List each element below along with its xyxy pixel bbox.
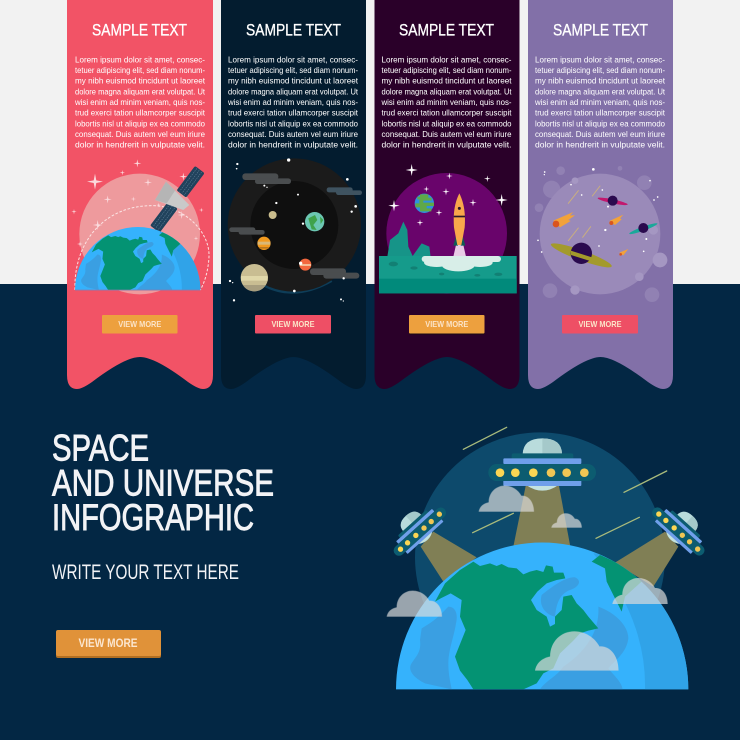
panel 1 body text: consequat. Duis autem vel eum iriure <box>75 129 205 139</box>
white stars <box>229 158 357 302</box>
panel: satellite and earth <box>67 0 213 389</box>
panel 1 body text: dolore magna aliquam erat volutpat. Ut <box>75 86 206 96</box>
panel: solar system <box>221 0 366 389</box>
ground <box>379 256 517 293</box>
main button: VIEW MORE <box>78 638 138 650</box>
icon: earth <box>396 543 690 689</box>
illustration: planets and comets <box>535 166 667 302</box>
panel 1 body text <box>74 54 206 150</box>
light beams <box>421 486 678 587</box>
panel 4 body text: consequat. Duis autem vel eum iriure <box>535 129 665 139</box>
panel 3 body text: wisi enim ad minim veniam, quis nos- <box>381 97 512 107</box>
panel 2 heading: SAMPLE TEXT <box>246 20 341 40</box>
panel 4 body text: trud exerci tation ullamcorper suscipit <box>535 108 666 118</box>
panel 3 button <box>409 315 484 334</box>
background: dark navy lower area <box>0 284 740 740</box>
panel 2 body text: my nibh euismod tincidunt ut laoreet <box>228 76 359 86</box>
panel 4 body text: dolore magna aliquam erat volutpat. Ut <box>535 86 666 96</box>
clouds <box>387 486 668 671</box>
background: light top band <box>0 0 740 284</box>
panel 4 body text: dolor in hendrerit in vulputate velit. <box>535 140 665 150</box>
panel 3 body text: dolor in hendrerit in vulputate velit. <box>382 140 512 150</box>
ringed planet: pink <box>597 196 628 206</box>
panel 3 body text: Lorem ipsum dolor sit amet, consec- <box>382 54 512 64</box>
title: INFOGRAPHIC <box>52 497 254 538</box>
title: AND UNIVERSE <box>52 462 274 504</box>
panel: ringed planets and comets <box>528 0 673 389</box>
illustration: satellite orbiting earth <box>71 159 209 294</box>
panel 2 body text: dolore magna aliquam erat volutpat. Ut <box>228 86 359 96</box>
rock formation <box>387 222 431 257</box>
panel 1 body text: dolor in hendrerit in vulputate velit. <box>75 140 205 150</box>
panel 3 body text: my nibh euismod tincidunt ut laoreet <box>382 76 512 86</box>
planet: small beige <box>269 211 277 219</box>
panel 4 heading: SAMPLE TEXT <box>553 20 648 40</box>
main button <box>56 630 161 658</box>
icon: satellite <box>150 166 205 233</box>
ringed planet: large <box>549 240 613 271</box>
planet: earth <box>305 212 324 231</box>
panel 2 button: VIEW MORE <box>272 319 315 329</box>
icon: rocket <box>453 193 466 257</box>
panel 1 button: VIEW MORE <box>118 319 162 329</box>
panel 2 body text <box>227 54 359 150</box>
panel 2 body text: tetuer adipiscing elit, sed diam nonum- <box>228 65 358 75</box>
panel 2 body text: trud exerci tation ullamcorper suscipit <box>228 108 359 118</box>
planet: red <box>299 259 311 271</box>
planet: blue and green <box>415 194 434 213</box>
panel 4 button: VIEW MORE <box>578 319 622 329</box>
panel 4 body text: wisi enim ad minim veniam, quis nos- <box>534 97 665 107</box>
panel 3 heading: SAMPLE TEXT <box>399 20 494 40</box>
planet: large beige striped <box>241 264 268 291</box>
panel 1 body text: trud exerci tation ullamcorper suscipit <box>75 108 206 118</box>
panel 2 body text: dolor in hendrerit in vulputate velit. <box>228 140 358 150</box>
panel 1 body text: wisi enim ad minim veniam, quis nos- <box>74 97 205 107</box>
panel 3 body text <box>381 54 512 150</box>
panel 3 body text: tetuer adipiscing elit, sed diam nonum- <box>382 65 512 75</box>
title <box>52 428 274 538</box>
panel 4 button <box>562 315 638 334</box>
panel 2 body text: Lorem ipsum dolor sit amet, consec- <box>228 54 358 64</box>
illustration: UFOs over earth <box>381 427 717 689</box>
illustration: planets in dark orbit <box>228 158 362 302</box>
planet: orange striped <box>257 237 271 250</box>
UFO: left <box>381 494 452 562</box>
panel 1 button <box>102 315 178 334</box>
panel 4 body text <box>534 54 666 150</box>
panel 1 body text: Lorem ipsum dolor sit amet, consec- <box>75 54 205 64</box>
panel 4 body text: Lorem ipsum dolor sit amet, consec- <box>535 54 665 64</box>
panel 2 button <box>255 315 331 334</box>
backdrop circle <box>415 432 665 682</box>
panel 4 body text: tetuer adipiscing elit, sed diam nonum- <box>535 65 665 75</box>
icon: earth dome <box>75 227 201 290</box>
panel 1 body text: tetuer adipiscing elit, sed diam nonum- <box>75 65 205 75</box>
panel 3 body text: consequat. Duis autem vel eum iriure <box>382 129 512 139</box>
panel 3 button: VIEW MORE <box>425 319 469 329</box>
panel 3 body text: trud exerci tation ullamcorper suscipit <box>382 108 512 118</box>
panel 1 heading: SAMPLE TEXT <box>92 20 187 40</box>
smoke cloud <box>422 256 501 271</box>
panel 2 body text: consequat. Duis autem vel eum iriure <box>228 129 358 139</box>
grey clouds <box>229 173 359 279</box>
illustration: rocket lifting off <box>379 164 517 294</box>
subtitle: WRITE YOUR TEXT HERE <box>52 560 239 584</box>
panel: rocket launch <box>374 0 520 389</box>
UFO: right <box>646 493 717 562</box>
meteor streaks <box>568 186 600 241</box>
panel 1 body text: lobortis nisl ut aliquip ex ea commodo <box>75 118 205 128</box>
panel 3 body text: lobortis nisl ut aliquip ex ea commodo <box>382 118 512 128</box>
panel 2 body text: lobortis nisl ut aliquip ex ea commodo <box>228 118 358 128</box>
title: SPACE <box>52 428 149 468</box>
panel 4 body text: lobortis nisl ut aliquip ex ea commodo <box>535 118 665 128</box>
panel 3 body text: dolore magna aliquam erat volutpat. Ut <box>382 86 512 96</box>
white specks <box>537 168 658 253</box>
panel 1 body text: my nibh euismod tincidunt ut laoreet <box>75 76 206 86</box>
panel 4 body text: my nibh euismod tincidunt ut laoreet <box>535 76 666 86</box>
ringed planet: teal <box>629 222 658 236</box>
panel 2 body text: wisi enim ad minim veniam, quis nos- <box>227 97 358 107</box>
UFO: center <box>488 438 596 491</box>
comets <box>553 212 628 256</box>
meteor streaks <box>463 427 667 538</box>
